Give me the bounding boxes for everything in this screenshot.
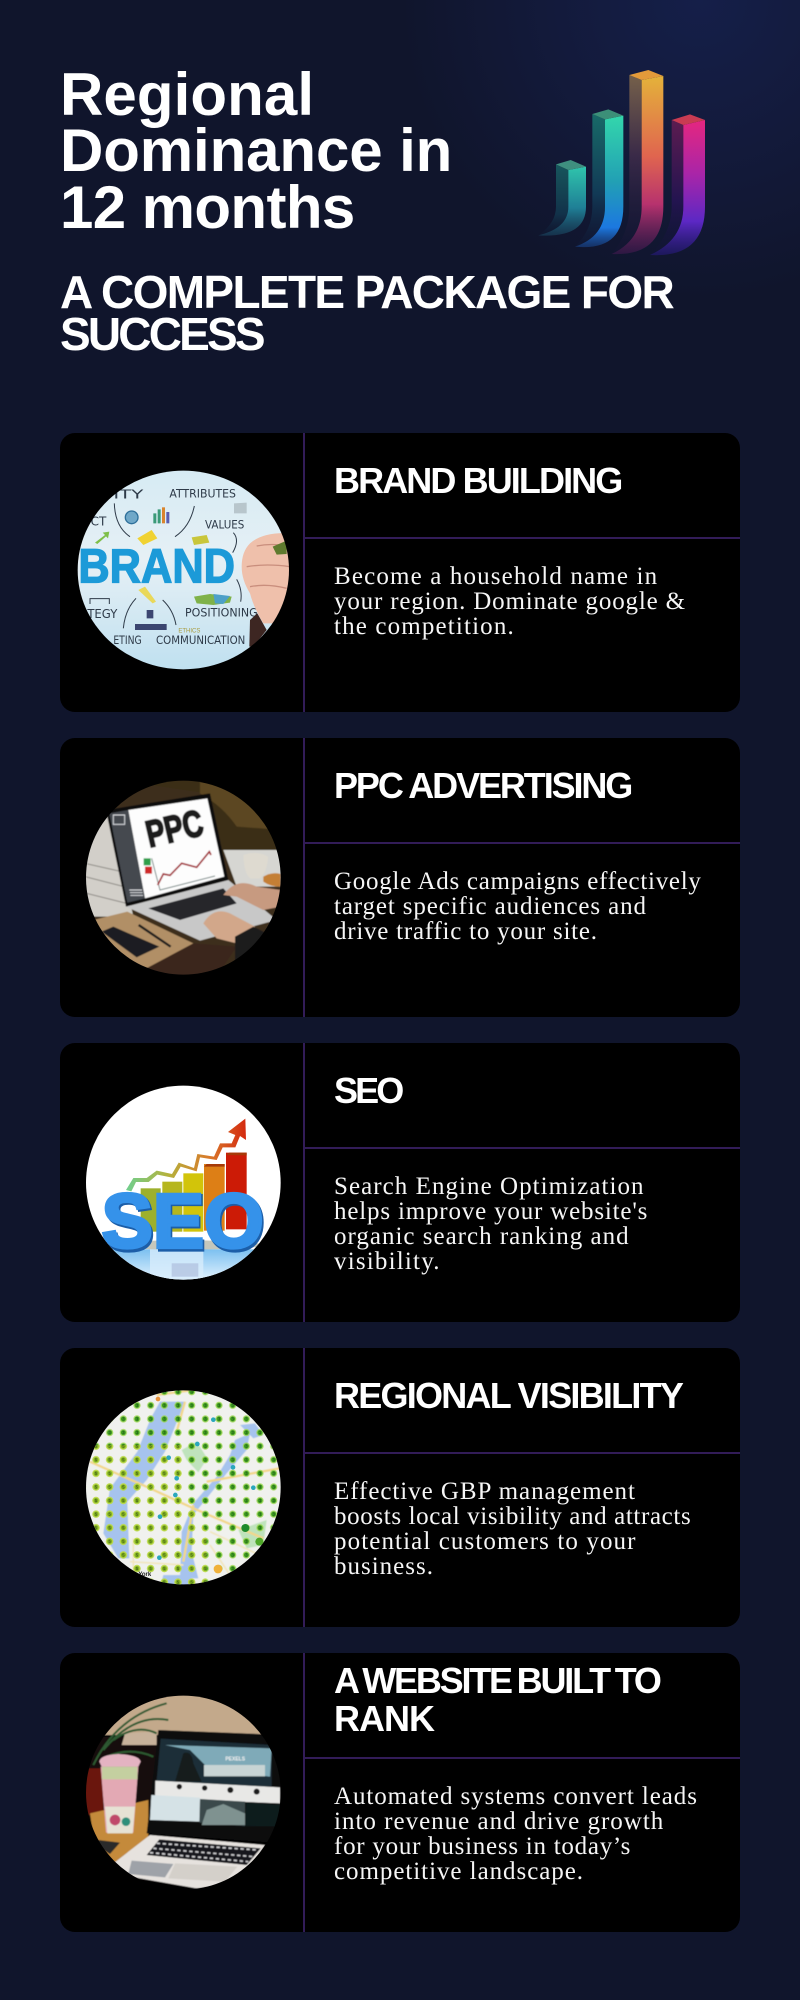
icon: 3D rising bar chart [538,70,705,256]
title: Dominance in [60,117,452,184]
text: ppc description: drive traffic to your site. [334,918,598,944]
text: ppc description: target specific audiences and [334,892,647,920]
image: laptop website circle [86,1696,281,1889]
image: brand circle: ATTRIBUTES [169,486,236,500]
image: brand circle: POSITIONING [185,606,258,620]
subtitle: SUCCESS [60,308,263,360]
text: regional visibility description [334,1478,691,1580]
image: brand circle: TEGY [86,607,118,621]
text: ppc description [334,868,702,944]
text: seo description: visibility. [334,1248,441,1274]
image: brand circle: ITY [113,486,144,501]
text: seo description: organic search ranking and [334,1222,630,1250]
heading: a website built to rank: RANK [334,1698,434,1738]
heading: brand building: BRAND BUILDING [334,460,621,500]
heading: seo: SEO [334,1070,401,1110]
text: brand building description [334,562,686,640]
image: brand circle: CT [91,514,107,528]
title: Regional [60,60,314,128]
image: seo circle [86,1086,281,1280]
text: regional visibility description: potential customers to your [334,1528,637,1554]
text: website description: competitive landscape. [334,1858,584,1884]
panel: website built to rank [60,1653,740,1932]
text: website description [334,1782,698,1884]
image: brand circle: ETHICS [178,629,200,635]
heading: a website built to rank: A WEBSITE BUILT TO [334,1660,660,1700]
text: website description: for your business in today’s [334,1832,631,1860]
text: website description: Automated systems convert leads [334,1782,698,1810]
heading: ppc advertising: PPC ADVERTISING [334,764,631,806]
panel: brand building [60,433,740,712]
subtitle: A COMPLETE PACKAGE FOR [60,266,673,318]
heading: regional visibility: REGIONAL VISIBILITY [334,1374,682,1416]
chart bar: green-blue [575,109,623,247]
image: brand circle: VALUES [205,518,244,532]
heading: a website built to rank [334,1660,660,1738]
panel: ppc advertising [60,738,740,1017]
text: seo description: Search Engine Optimization [334,1172,645,1200]
text: seo description: helps improve your website's [334,1198,648,1224]
text: ppc description: Google Ads campaigns effectively [334,868,702,894]
text: brand building description: your region. Dominate google & [334,588,686,614]
panel: seo [60,1043,740,1322]
title: 12 months [60,174,355,240]
image: seo circle: SEO [102,1178,264,1264]
image: brand circle: ETING [113,633,142,647]
image: rank-grid map circle: York [138,1572,152,1578]
image: laptop website circle: PEXELS [225,1757,246,1763]
chart bar: magenta-purple [650,114,705,255]
panel: regional visibility [60,1348,740,1627]
text: seo description [334,1172,648,1274]
image: brand circle: BRAND [78,541,235,594]
image: brand circle [78,470,289,670]
title [60,60,452,240]
image: ppc laptop circle: PPC [142,801,207,855]
text: brand building description: Become a household name in [334,562,658,590]
text: brand building description: the competition. [334,612,515,640]
image: brand circle: COMMUNICATION [156,633,245,647]
image: seo circle: SEO [103,1179,265,1267]
text: regional visibility description: boosts local visibility and attracts [334,1502,691,1530]
chart bar: teal [538,160,586,236]
image: rank-grid map circle [86,1390,281,1584]
chart bar: orange-red [612,70,663,254]
text: regional visibility description: business. [334,1552,434,1580]
image: ppc laptop circle [86,780,281,975]
text: regional visibility description: Effective GBP management [334,1478,636,1504]
subtitle [60,266,674,360]
text: website description: into revenue and drive growth [334,1808,664,1834]
